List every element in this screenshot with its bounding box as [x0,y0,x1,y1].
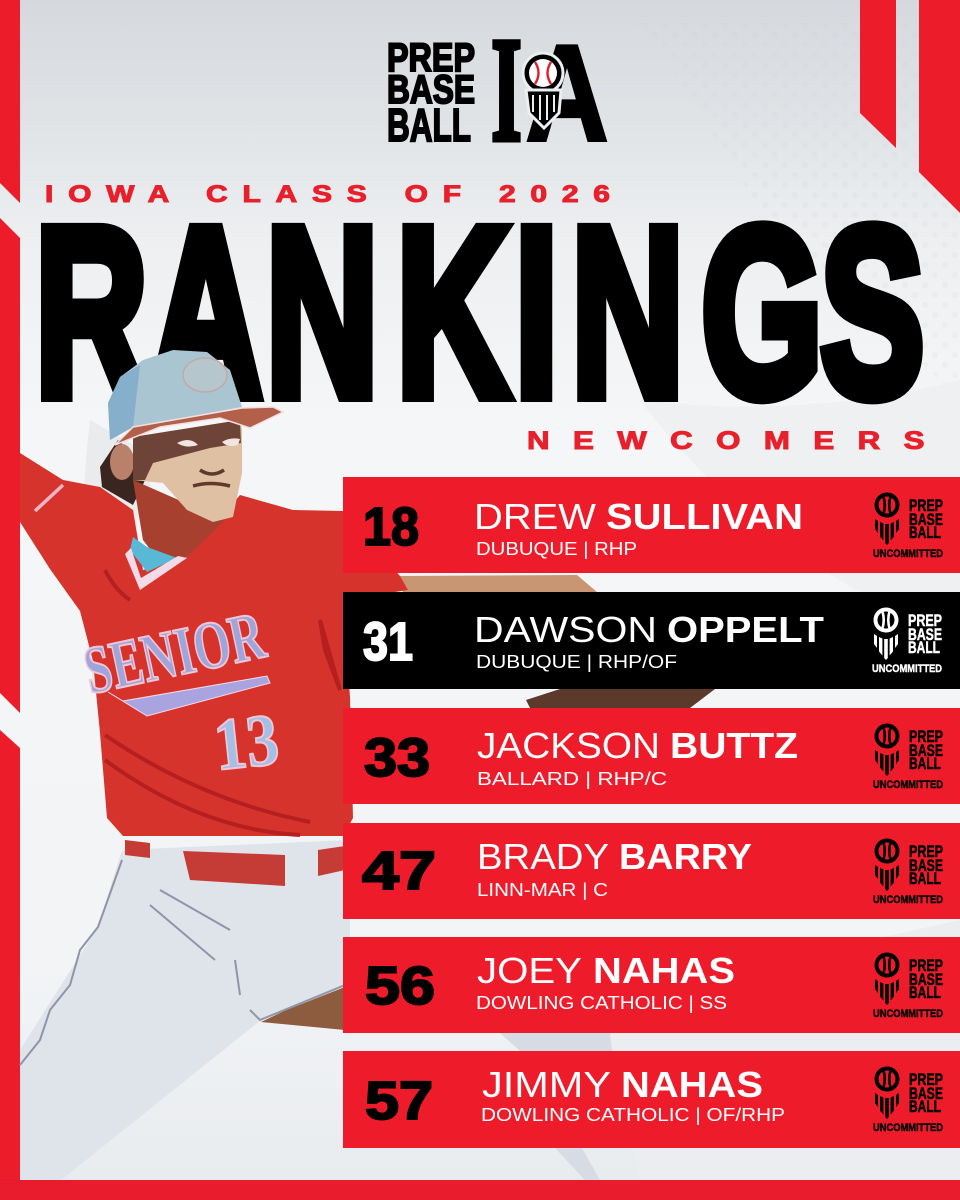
row: rank 57 Jimmy Nahas: DOWLING CATHOLIC | OF/RHP [481,1105,785,1125]
brand logo: Prep Baseball IA: BASE [387,68,475,112]
brand logo: Prep Baseball IA: BALL [387,99,471,151]
row: rank 47 Brady Barry: BALL [909,870,941,888]
jersey shading folds [105,570,340,835]
row: rank 57 Jimmy Nahas: BALL [909,1098,941,1116]
row: rank 47 Brady Barry: UNCOMMITTED [873,894,943,906]
row: rank 56 Joey Nahas: DOWLING CATHOLIC | SS [476,993,727,1013]
row: rank 47 Brady Barry: BARRY [619,836,752,877]
sleeve trim [35,485,63,511]
row: rank 57 Jimmy Nahas [343,1051,960,1148]
row: rank 47 Brady Barry: PREP [909,843,943,861]
row: rank 31 Dawson Oppelt: BASE [908,626,942,644]
jersey number: 13 [210,699,282,787]
row: rank 18 Drew Sullivan: BASE [909,511,943,529]
jersey V-neck trim [125,548,187,590]
top right red accent bars [860,0,960,213]
row: rank 31 Dawson Oppelt: 31 [363,612,413,672]
jersey swoosh [108,676,270,716]
row: rank 33 Jackson Buttz: JACKSON [477,725,660,766]
pitcher back leg [500,1033,612,1180]
row: rank 47 Brady Barry [343,823,960,919]
row: rank 56 Joey Nahas: PREP [909,957,943,975]
pants [20,840,350,1180]
undershirt collar [130,537,177,572]
brand logo: Prep Baseball IA [387,7,608,173]
jersey lettering: SENIOR [77,596,272,709]
row: rank 33 Jackson Buttz: 33 [364,728,430,788]
bottom red frame bar [0,1180,960,1200]
row: rank 18 Drew Sullivan: DREW [474,496,596,537]
row: rank 18 Drew Sullivan: UNCOMMITTED [873,548,943,560]
pants folds [20,860,345,1065]
row: rank 57 Jimmy Nahas: UNCOMMITTED [873,1122,943,1134]
row: rank 31 Dawson Oppelt: UNCOMMITTED [872,663,942,675]
row: rank 33 Jackson Buttz: PREP [909,728,943,746]
row: rank 56 Joey Nahas: BALL [909,984,941,1002]
row: rank 18 Drew Sullivan: 18 [363,497,419,557]
cap side panel shading [108,365,140,440]
row: rank 18 Drew Sullivan: PREP [909,497,943,515]
row: rank 18 Drew Sullivan [343,477,960,573]
jersey [20,453,408,836]
face [133,420,242,522]
row: rank 57 Jimmy Nahas: 57 [365,1071,433,1131]
row: rank 33 Jackson Buttz: BUTTZ [670,725,798,766]
pitching arm and hand [395,575,597,592]
row: rank 31 Dawson Oppelt: BALL [908,639,940,657]
row: rank 18 Drew Sullivan: BALL [909,524,941,542]
row: rank 56 Joey Nahas [343,937,960,1033]
glove below row two [526,689,715,708]
cap brim [115,407,283,445]
row: rank 31 Dawson Oppelt: DAWSON [474,609,657,650]
row: rank 57 Jimmy Nahas: NAHAS [621,1064,763,1105]
row: rank 57 Jimmy Nahas: JIMMY [482,1064,611,1105]
row: rank 56 Joey Nahas: BASE [909,971,943,989]
row: rank 31 Dawson Oppelt: DUBUQUE | RHP/OF [476,652,677,672]
row: rank 33 Jackson Buttz: BALL [909,755,941,773]
heading: Iowa Class of 2026: IOWA CLASS OF 2026 [45,180,610,207]
row: rank 57 Jimmy Nahas: PREP [909,1071,943,1089]
cap shadow over eyes [133,420,241,480]
row: rank 18 Drew Sullivan: DUBUQUE | RHP [476,539,637,559]
row: rank 47 Brady Barry: BRADY [477,836,609,877]
brand logo: Prep Baseball IA: I [491,7,522,173]
neck in shadow [133,480,225,562]
row: rank 31 Dawson Oppelt: OPPELT [667,609,824,650]
cap crown [108,350,242,440]
row: rank 47 Brady Barry: BASE [909,857,943,875]
belt [125,840,345,886]
brand logo: Prep Baseball IA: PREP [387,36,475,80]
row: rank 33 Jackson Buttz: UNCOMMITTED [873,779,943,791]
row: rank 33 Jackson Buttz: BASE [909,742,943,760]
eyes [177,438,240,447]
left red frame bar [0,0,20,1180]
row: rank 33 Jackson Buttz [343,708,960,804]
player illustration: pitcher [20,350,715,1180]
row: rank 31 Dawson Oppelt: PREP [908,612,942,630]
row: rank 47 Brady Barry: LINN-MAR | C [477,880,608,900]
heading: Rankings: RANKINGS [35,178,924,446]
row: rank 56 Joey Nahas: 56 [365,956,435,1016]
row: rank 56 Joey Nahas: UNCOMMITTED [873,1008,943,1020]
hair [100,440,150,505]
row: rank 56 Joey Nahas: NAHAS [593,950,735,991]
row: rank 33 Jackson Buttz: BALLARD | RHP/C [477,769,667,789]
row: rank 18 Drew Sullivan: SULLIVAN [606,496,803,537]
front leg skin [261,982,345,1030]
heading: Newcomers: NEWCOMERS [527,426,925,454]
row: rank 31 Dawson Oppelt [343,592,960,689]
cap logo [183,358,227,392]
row: rank 47 Brady Barry: 47 [362,841,436,901]
brand logo: Prep Baseball IA: A [526,17,608,169]
ear [110,444,134,480]
row: rank 57 Jimmy Nahas: BASE [909,1085,943,1103]
row: rank 56 Joey Nahas: JOEY [477,950,582,991]
nose and mouth [193,470,230,486]
